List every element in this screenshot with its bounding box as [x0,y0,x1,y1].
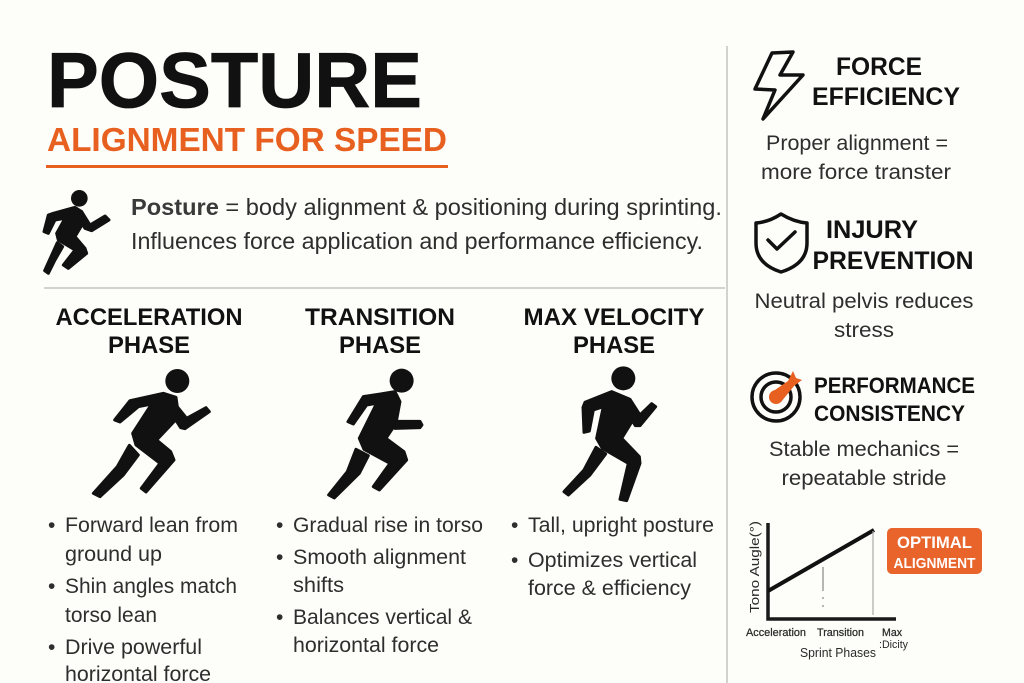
bullet list: transition: Smooth alignment [293,546,466,569]
icon: max velocity runner [564,366,656,501]
callout: optimal alignment: OPTIMAL [897,533,972,552]
y axis label: Tono Augle(°) [747,521,762,613]
heading: injury prevention: INJURY [826,216,918,244]
heading: transition [305,304,455,359]
subtitle: ALIGNMENT FOR SPEED [47,121,447,158]
heading: force efficiency [812,53,960,111]
bullet list: max velocity: force & efficiency [528,577,691,600]
x axis labels: Transition [817,627,864,639]
bullet list: acceleration: ground up [65,543,162,566]
x axis labels [746,627,908,660]
heading: acceleration: ACCELERATION [56,304,242,331]
panel: acceleration phase [48,304,242,683]
heading: transition: PHASE [339,332,421,359]
bullet list: transition: horizontal force [293,634,439,657]
bullet list: acceleration: torso lean [65,604,157,627]
text: performance consistency [769,438,959,490]
icon: lightning bolt [755,52,803,119]
heading: max velocity [524,304,704,359]
panel: max velocity phase [511,304,714,600]
text: force efficiency: Proper alignment = [766,132,948,155]
bullet list: acceleration: • [48,636,55,659]
callout: optimal alignment [887,528,982,574]
bullet list: transition: • [276,546,283,569]
bullet list: max velocity: • [511,549,518,572]
x axis labels: :Dicity [879,639,908,651]
panel: performance consistency [752,371,975,490]
icon: transition runner [329,369,422,498]
x axis labels: Acceleration [746,627,806,639]
bullet list: max velocity: Optimizes vertical [528,549,697,572]
intro text: Influences force application and performance efficiency. [131,228,703,254]
axes [768,523,896,619]
bullet list: max velocity: Tall, upright posture [528,514,714,537]
heading: max velocity: PHASE [573,332,655,359]
x axis labels: Sprint Phases [800,645,876,660]
heading: max velocity: MAX VELOCITY [524,304,704,331]
line chart [746,521,908,660]
heading: acceleration [56,304,242,359]
panel: injury prevention [754,214,974,342]
bullet list: transition: • [276,606,283,629]
callout: optimal alignment: ALIGNMENT [894,555,976,572]
text: injury prevention: Neutral pelvis reduces [754,290,974,313]
text: performance consistency: Stable mechanics = [769,438,959,461]
bullet list: acceleration: • [48,575,55,598]
data line [768,530,874,591]
bullet list: max velocity [511,514,714,600]
icon: shield check [756,214,807,272]
x axis labels: Max [882,627,902,639]
bullet list: transition: Balances vertical & [293,606,472,629]
icon: target [752,371,802,421]
heading: transition: TRANSITION [305,304,455,331]
intro text: Posture = body alignment & positioning during sprinting. [131,194,722,220]
bullet list: acceleration: Drive powerful [65,636,202,659]
icon: acceleration runner [93,369,209,497]
bullet list: acceleration: Shin angles match [65,575,237,598]
bullet list: transition [276,514,483,657]
text: injury prevention: stress [834,319,894,342]
bullet list: acceleration: • [48,514,55,537]
icon: runner [44,190,109,273]
title: POSTURE [47,36,422,124]
heading: injury prevention: PREVENTION [812,247,974,275]
heading: acceleration: PHASE [108,332,190,359]
bullet list: max velocity: • [511,514,518,537]
intro text [131,194,722,254]
text: injury prevention [754,290,974,342]
text: force efficiency [761,132,951,184]
text: force efficiency: more force transter [761,161,951,184]
bullet list: acceleration [48,514,238,683]
panel: transition phase [276,304,483,657]
panel: force efficiency [755,52,960,184]
heading: performance consistency: PERFORMANCE [814,373,975,398]
bullet list: acceleration: Forward lean from [65,514,238,537]
bullet list: transition: Gradual rise in torso [293,514,483,537]
heading: performance consistency: CONSISTENCY [814,401,965,426]
bullet list: transition: • [276,514,283,537]
bullet list: transition: shifts [293,574,344,597]
heading: injury prevention [812,216,974,275]
text: performance consistency: repeatable stride [782,467,946,490]
heading: force efficiency: EFFICIENCY [812,83,960,111]
heading: force efficiency: FORCE [836,53,922,81]
heading: performance consistency [814,373,975,426]
